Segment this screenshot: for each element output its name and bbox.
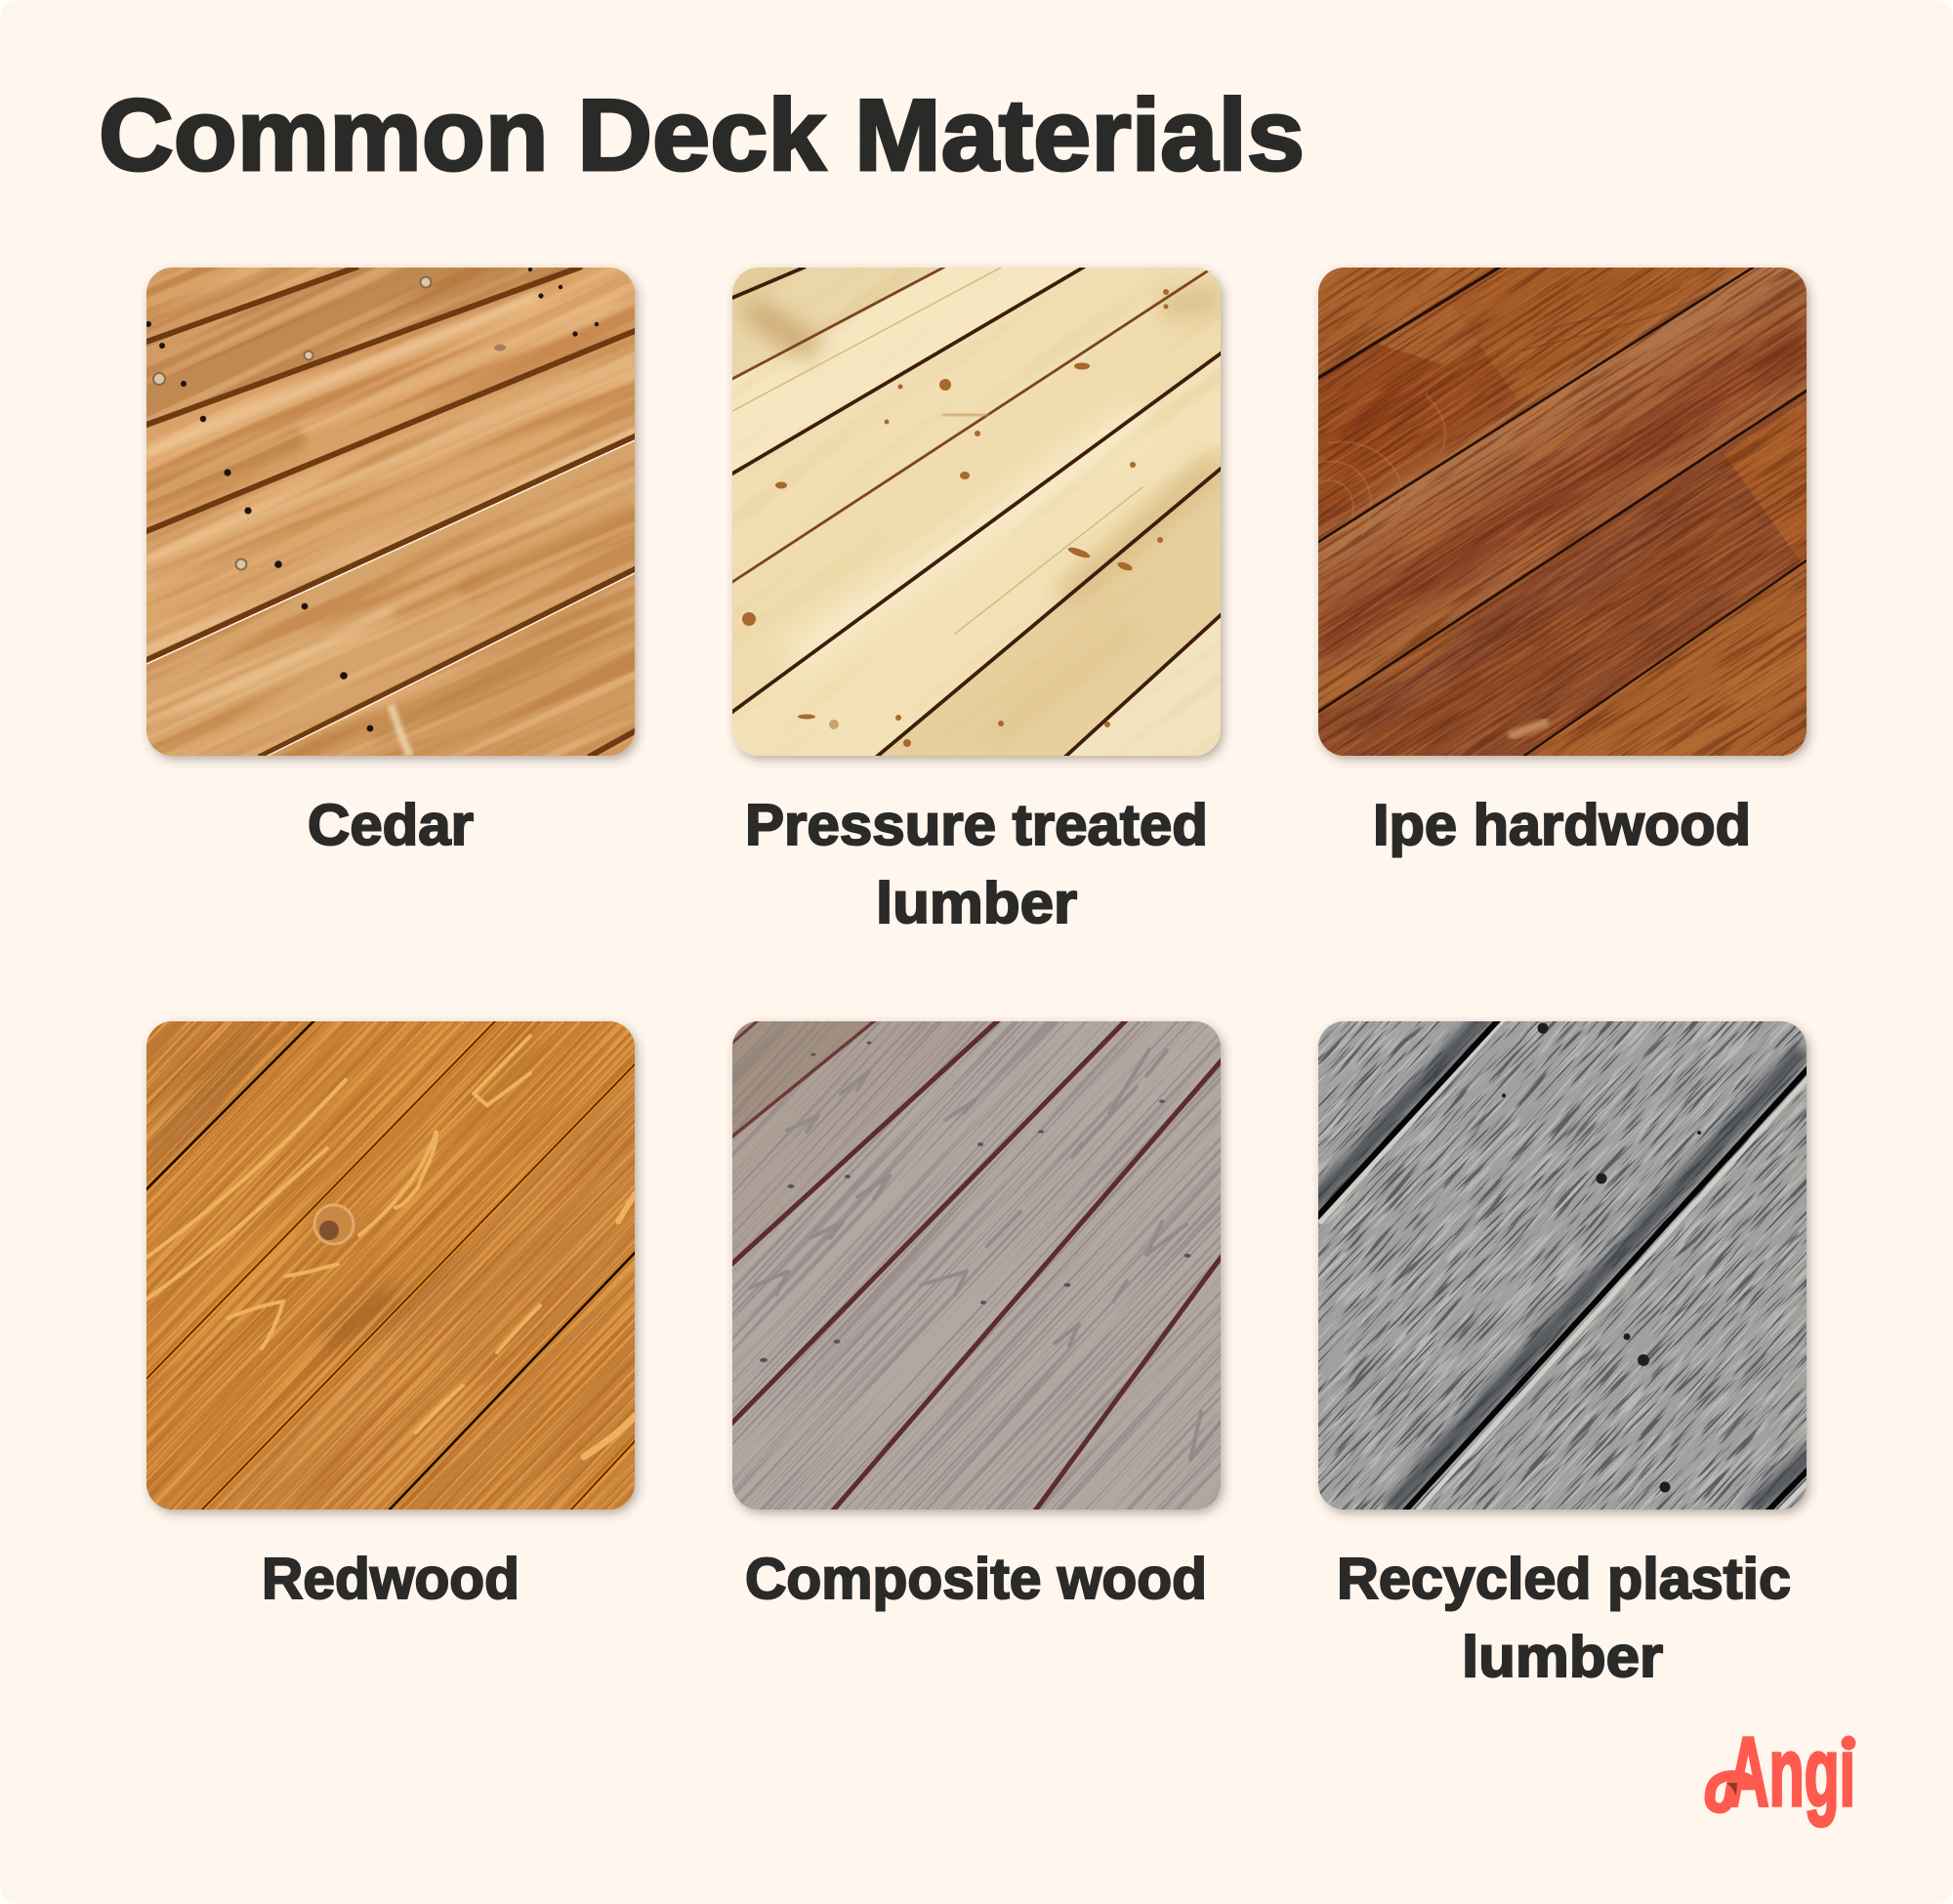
photo: dark red hardwood [1318, 268, 1807, 756]
panel: redwood [143, 1019, 644, 1519]
knot [314, 1205, 353, 1244]
worn patch [1509, 722, 1548, 736]
photo: cedar deck boards [146, 268, 635, 756]
panel: composite wood [479, 768, 1474, 1762]
logo: Angi [1710, 1718, 1859, 1827]
knot: joint [391, 705, 410, 756]
panel: ipe hardwood [1314, 266, 1816, 766]
label: composite wood: Composite wood [745, 1547, 1207, 1611]
cathedral grain [146, 1036, 635, 1457]
figured grain swirl [1318, 282, 1728, 536]
label: ipe hardwood: Ipe hardwood [1373, 793, 1751, 857]
panel: recycled plastic lumber [1065, 768, 1953, 1762]
photo: grey composite boards [479, 768, 1474, 1762]
title: Common Deck Materials [99, 79, 1305, 192]
stain cluster [942, 414, 988, 416]
label: recycled plastic lumber: Recycled plastic [1337, 1547, 1791, 1611]
logo dot [1842, 1736, 1855, 1750]
knots [742, 289, 1169, 747]
knots [153, 277, 506, 570]
board gaps [1318, 268, 1807, 756]
cathedral grain marks [750, 1050, 1221, 1460]
panel: cedar [143, 266, 644, 766]
label: pressure treated lumber: Pressure treated [745, 793, 1208, 857]
photo: pale pine boards [732, 268, 1221, 756]
fasteners [1502, 1023, 1701, 1492]
logo: Angi: Angi [1727, 1718, 1855, 1827]
label: cedar: Cedar [308, 793, 474, 857]
screws [760, 1041, 1191, 1362]
label: recycled plastic lumber [1337, 1547, 1791, 1689]
label: pressure treated lumber: lumber [876, 871, 1077, 935]
logo swoosh [1710, 1776, 1750, 1808]
board gaps with shadow [1314, 1015, 1813, 1515]
board gaps [732, 268, 1221, 756]
photo: orange redwood boards [146, 1021, 635, 1510]
photo: grey ridged boards [1065, 768, 1953, 1762]
logo: dot mask [1840, 1728, 1859, 1751]
fastener holes [145, 268, 599, 731]
logo fold [1726, 1783, 1737, 1796]
label: pressure treated lumber [745, 793, 1208, 935]
board gaps [146, 268, 635, 756]
board gaps [732, 1021, 1221, 1510]
panel: pressure treated lumber [728, 266, 1230, 766]
board gaps [146, 1021, 635, 1510]
label: redwood: Redwood [262, 1547, 519, 1611]
label: recycled plastic lumber: lumber [1462, 1625, 1663, 1689]
